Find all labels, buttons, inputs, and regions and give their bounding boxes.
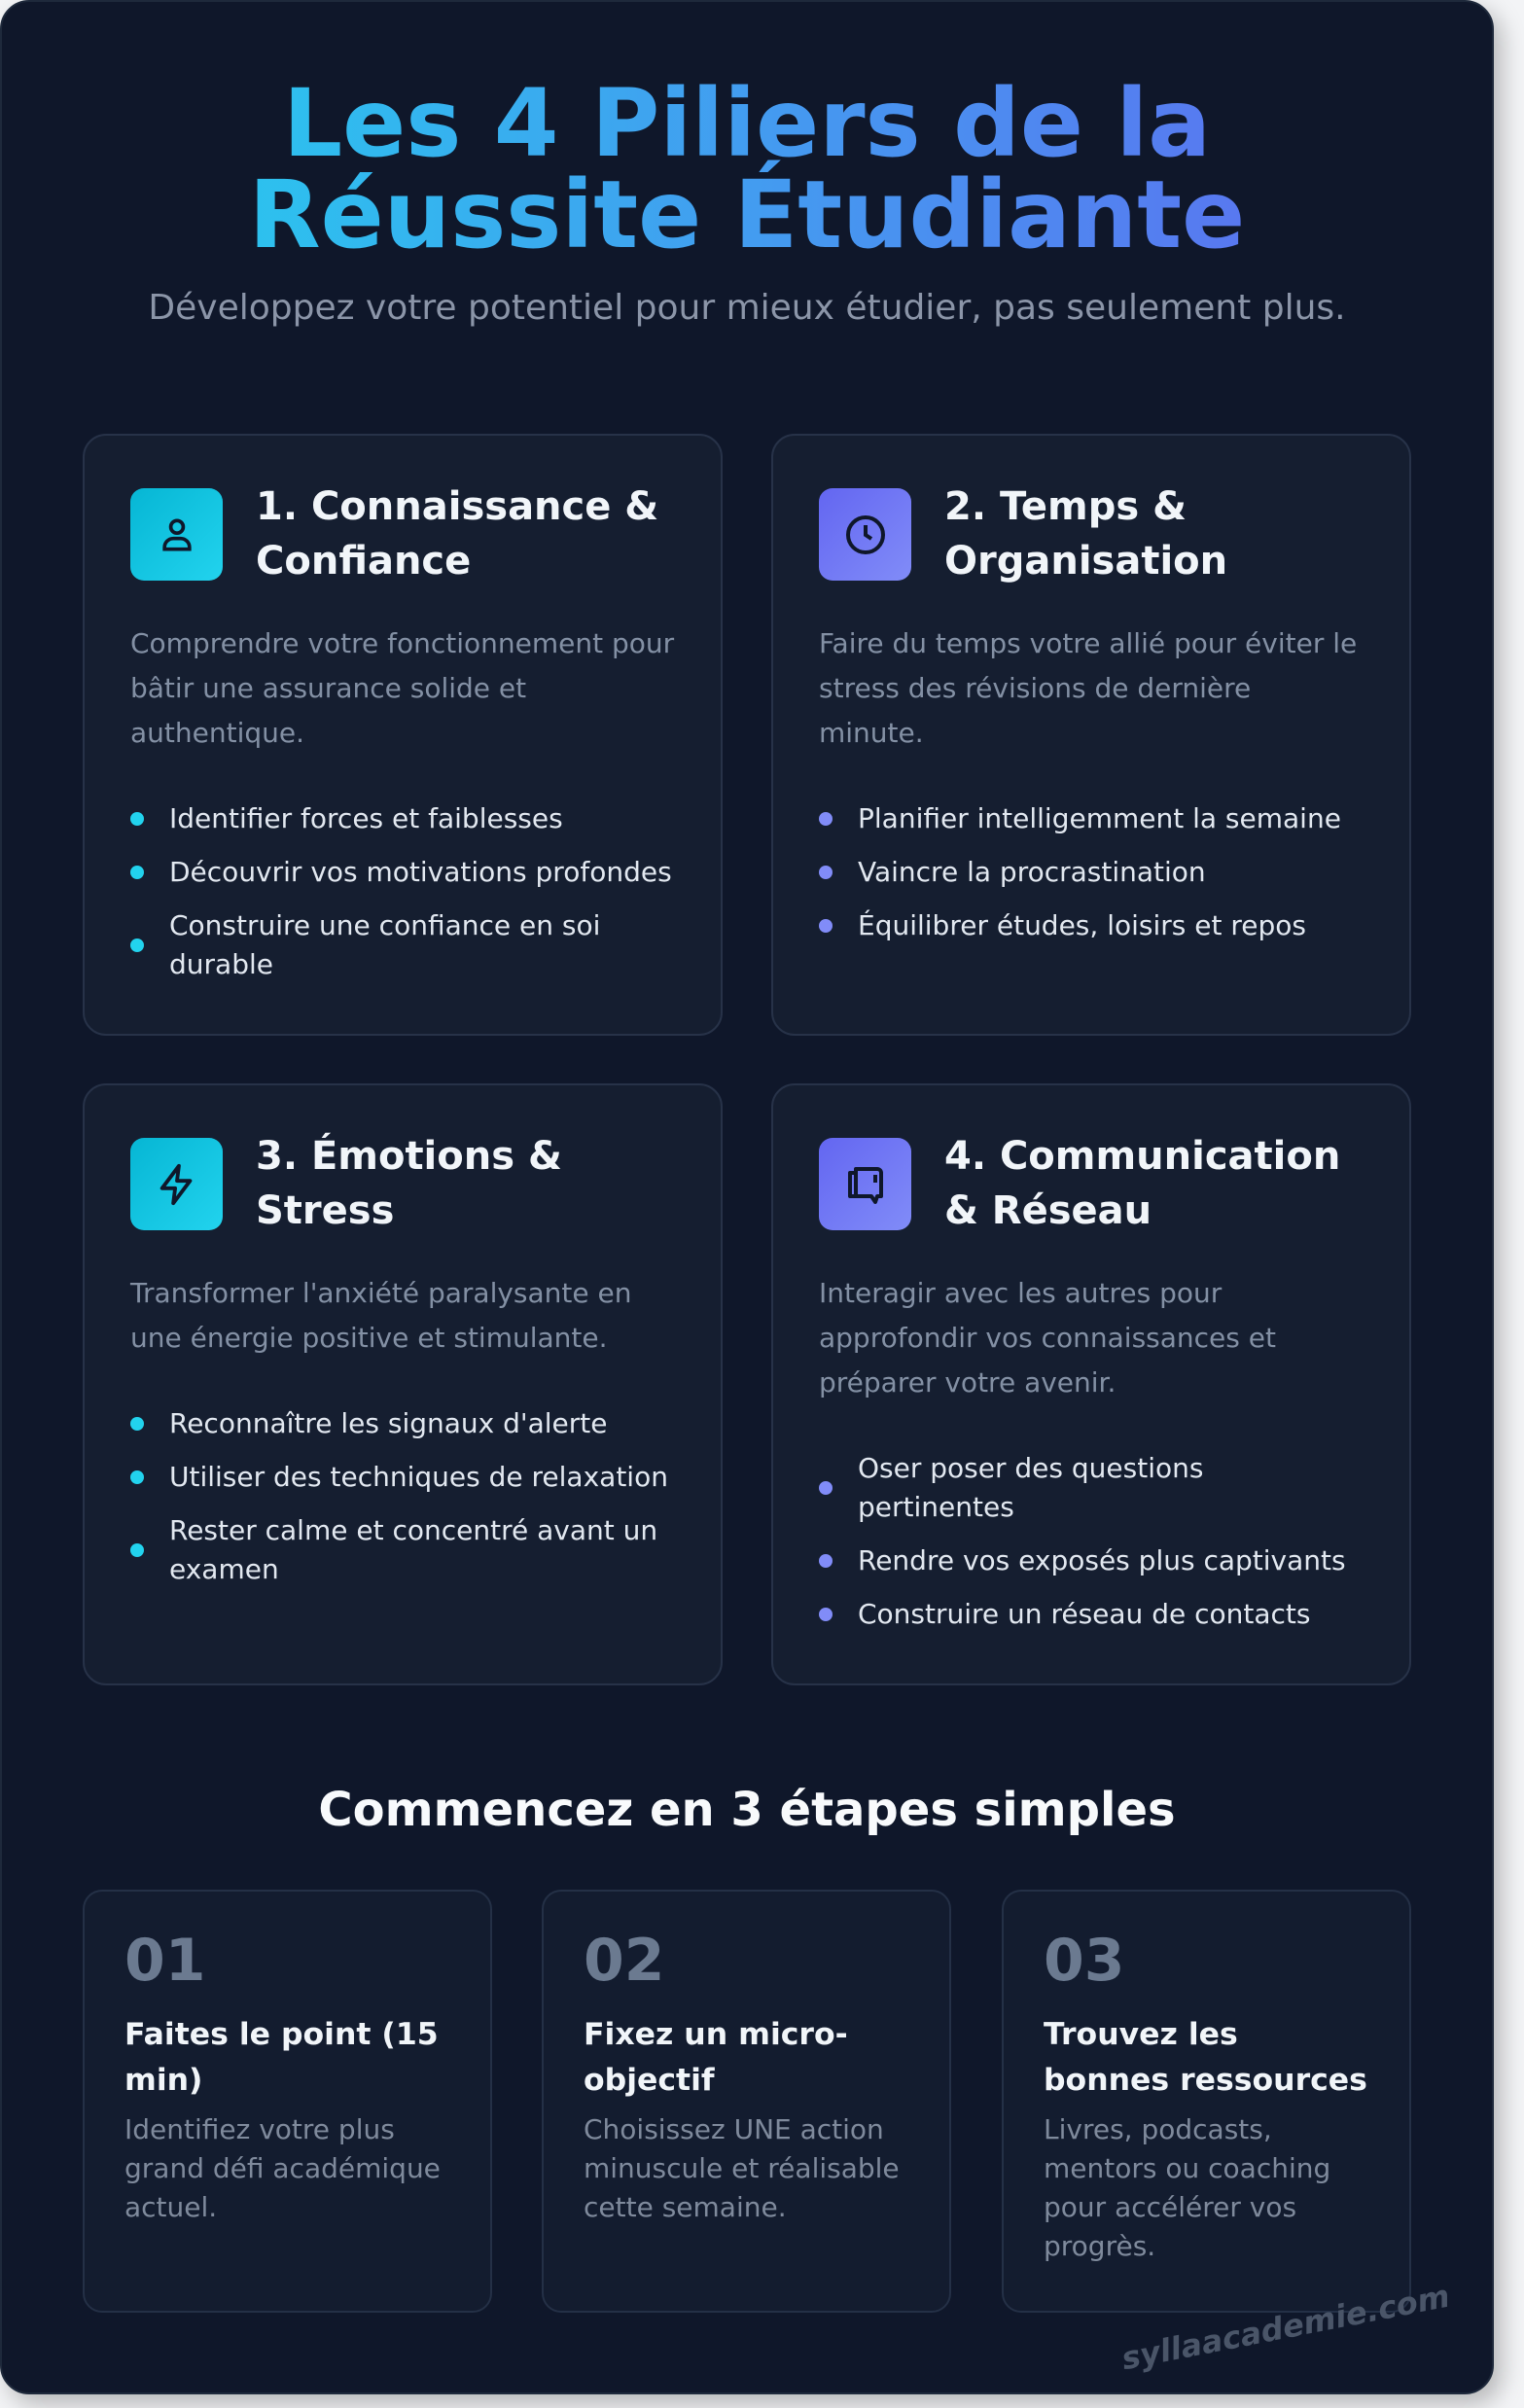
bullet list: Oser poser des questions: [858, 1452, 1203, 1484]
step 02: objectif: [584, 2063, 715, 2098]
heading: 3. Émotions & Stress: [256, 1134, 562, 1233]
title: Réussite Étudiante: [249, 160, 1245, 269]
step 01: [83, 1890, 492, 2313]
bullet list: Reconnaître les signaux d'alerte: [169, 1407, 607, 1439]
step 02: 02: [584, 1927, 665, 1995]
bullet list: Rendre vos exposés plus captivants: [858, 1544, 1346, 1576]
step 02: Fixez un micro-: [584, 2017, 848, 2052]
bullet list: Planifier intelligemment la semaine: [858, 802, 1341, 834]
panel: connaissance & confiance: [83, 434, 723, 1036]
panel: temps & organisation: [771, 434, 1411, 1036]
bullet list: Utiliser des techniques de relaxation: [169, 1461, 668, 1493]
step 03: bonnes ressources: [1044, 2063, 1367, 2098]
bullet list: Construire un réseau de contacts: [858, 1598, 1310, 1630]
description: Transformer l'anxiété paralysante en une énergie positive et stimulante.: [130, 1277, 632, 1354]
step 01: min): [124, 2063, 202, 2098]
bullet list: [819, 802, 1341, 941]
icon: clock: [819, 488, 911, 581]
step 01: Faites le point (15: [124, 2017, 439, 2052]
heading: 2. Temps & Organisation: [944, 484, 1227, 584]
bullet list: [130, 1407, 668, 1585]
bullet list: Vaincre la procrastination: [858, 856, 1206, 888]
step 03: Livres, podcasts, mentors ou coaching pour accélérer vos progrès.: [1044, 2113, 1330, 2262]
icon: chat: [819, 1138, 911, 1230]
title: [2, 78, 1492, 261]
description: Interagir avec les autres pour approfondir vos connaissances et préparer votre avenir.: [819, 1277, 1276, 1399]
panel: émotions & stress: [83, 1083, 723, 1685]
step 01: 01: [124, 1927, 206, 1995]
bullet list: examen: [169, 1553, 279, 1585]
watermark: syllaacademie.com: [1118, 2278, 1453, 2377]
step 03: Trouvez les: [1044, 2017, 1238, 2052]
heading: 4. Communication & Réseau: [944, 1134, 1340, 1233]
panel: communication & réseau: [771, 1083, 1411, 1685]
step 02: Choisissez UNE action minuscule et réalisable cette semaine.: [584, 2113, 900, 2223]
bullet list: [819, 1452, 1346, 1630]
section heading: Commencez en 3 étapes simples: [318, 1783, 1176, 1837]
bullet list: [130, 802, 672, 980]
icon: person: [130, 488, 223, 581]
heading: 1. Connaissance & Confiance: [256, 484, 658, 584]
bullet list: Équilibrer études, loisirs et repos: [858, 909, 1306, 941]
subtitle: Développez votre potentiel pour mieux étudier, pas seulement plus.: [148, 288, 1346, 328]
description: Comprendre votre fonctionnement pour bâtir une assurance solide et authentique.: [130, 627, 674, 749]
bullet list: pertinentes: [858, 1491, 1014, 1523]
step 03: [1002, 1890, 1411, 2313]
description: Faire du temps votre allié pour éviter le stress des révisions de dernière minute.: [819, 627, 1357, 749]
step 03: 03: [1044, 1927, 1124, 1995]
step 02: [542, 1890, 951, 2313]
bullet list: Construire une confiance en soi: [169, 909, 600, 941]
step 01: Identifiez votre plus grand défi académique actuel.: [124, 2113, 441, 2223]
bullet list: Identifier forces et faiblesses: [169, 802, 563, 834]
bullet list: Rester calme et concentré avant un: [169, 1514, 657, 1546]
icon: lightning: [130, 1138, 223, 1230]
title: Les 4 Piliers de la: [283, 69, 1211, 178]
bullet list: Découvrir vos motivations profondes: [169, 856, 672, 888]
bullet list: durable: [169, 948, 273, 980]
